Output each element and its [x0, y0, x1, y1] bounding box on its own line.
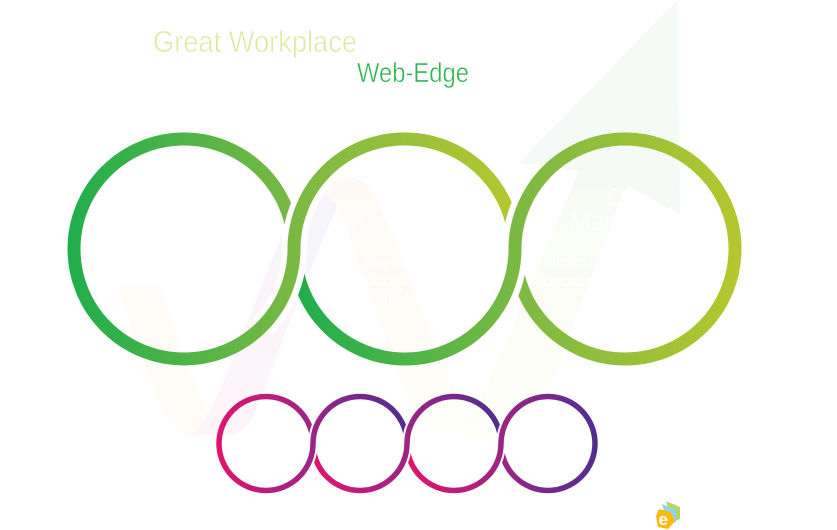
interlinked small rings — [219, 396, 595, 490]
white labels inside rings: Manager — [344, 208, 443, 236]
white labels inside rings: ment — [434, 430, 455, 440]
link ring one to two — [74, 139, 405, 359]
title: Great Workplace — [153, 24, 357, 59]
white labels inside rings: Manager — [570, 208, 669, 236]
white labels inside rings: duced by — [366, 272, 427, 289]
white labels inside rings: ligned T — [369, 291, 422, 308]
interlinked large rings — [74, 139, 735, 359]
link ring two to three — [405, 139, 735, 359]
white labels inside rings: The best — [363, 254, 422, 271]
background arrow ribbon — [118, 0, 680, 437]
ring arcs passing beneath the links — [74, 139, 735, 359]
title — [153, 24, 469, 88]
logo icon — [656, 501, 680, 529]
small links — [219, 396, 360, 490]
white labels inside rings: Minimize — [544, 254, 603, 271]
small arcs passing beneath the links — [219, 396, 595, 490]
white labels inside rings — [143, 184, 669, 440]
white labels inside rings: C — [607, 184, 625, 212]
small link gaps — [299, 410, 515, 477]
title: Web-Edge — [357, 57, 469, 88]
logo icon: e — [658, 510, 668, 529]
white labels inside rings: Em — [143, 291, 166, 308]
link gaps — [262, 171, 547, 327]
white labels inside rings: because — [544, 273, 601, 290]
